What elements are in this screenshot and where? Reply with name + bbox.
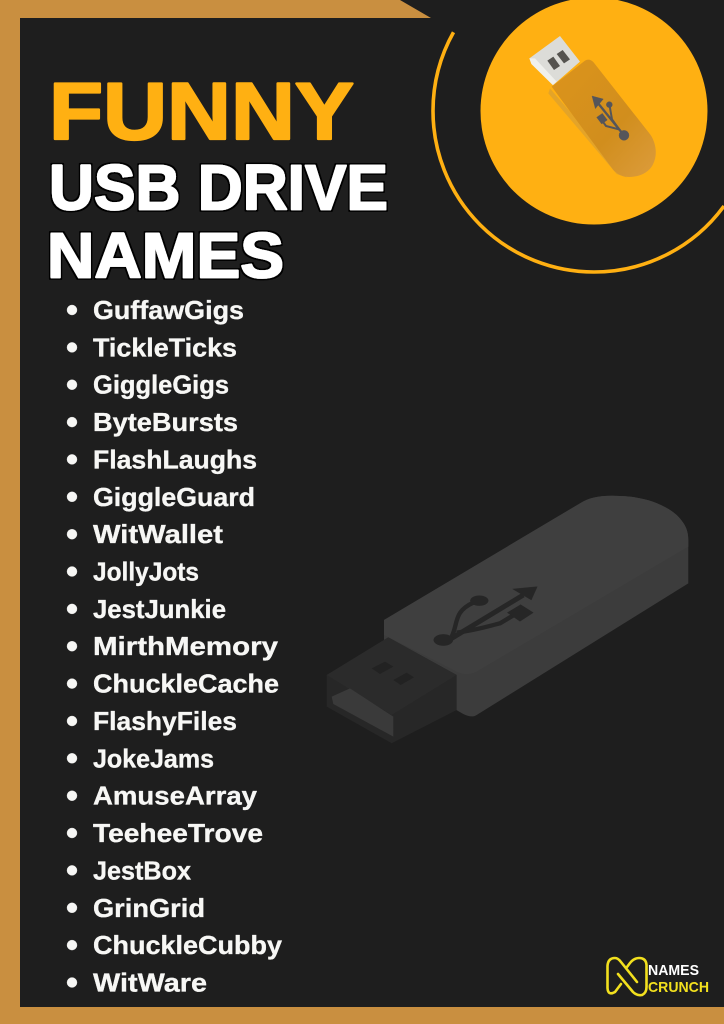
list item: GuffawGigs: GuffawGigs bbox=[93, 295, 244, 325]
list item: GrinGrid: GrinGrid bbox=[93, 893, 205, 923]
list item: ChuckleCache: ChuckleCache bbox=[93, 669, 279, 699]
faint USB drive illustration bbox=[327, 496, 688, 743]
list item: WitWallet: WitWallet bbox=[93, 519, 223, 549]
logo text: NAMES: NAMES bbox=[648, 962, 699, 979]
list item: ChuckleCubby: ChuckleCubby bbox=[93, 930, 283, 960]
list item: FlashLaughs: FlashLaughs bbox=[93, 444, 257, 474]
title line: USB DRIVE: USB DRIVE bbox=[49, 152, 388, 224]
list item: JollyJots: JollyJots bbox=[93, 556, 199, 586]
list item: AmuseArray: AmuseArray bbox=[93, 781, 258, 811]
list item: GiggleGigs: GiggleGigs bbox=[93, 370, 229, 400]
list item: WitWare: WitWare bbox=[93, 968, 207, 998]
title bbox=[47, 67, 388, 292]
list item: MirthMemory: MirthMemory bbox=[93, 631, 279, 661]
logo: Names Crunch bbox=[608, 958, 709, 996]
icon: N logo mark bbox=[608, 958, 646, 995]
list item: JokeJams: JokeJams bbox=[93, 743, 214, 773]
icon: orange USB drive bbox=[529, 36, 656, 177]
title line: FUNNY: FUNNY bbox=[49, 67, 354, 157]
list item: FlashyFiles: FlashyFiles bbox=[93, 706, 237, 736]
list item: ByteBursts: ByteBursts bbox=[93, 407, 238, 437]
list item: TeeheeTrove: TeeheeTrove bbox=[93, 818, 263, 848]
list item: TickleTicks: TickleTicks bbox=[93, 332, 237, 362]
list item: JestBox: JestBox bbox=[93, 855, 192, 885]
logo text: CRUNCH: CRUNCH bbox=[648, 979, 709, 996]
list: USB drive names bbox=[67, 295, 283, 998]
list item: GiggleGuard: GiggleGuard bbox=[93, 482, 255, 512]
list item: JestJunkie: JestJunkie bbox=[93, 594, 226, 624]
yellow arc ring bbox=[433, 32, 724, 272]
yellow circle behind USB bbox=[480, 0, 708, 224]
title line: NAMES: NAMES bbox=[47, 220, 284, 292]
